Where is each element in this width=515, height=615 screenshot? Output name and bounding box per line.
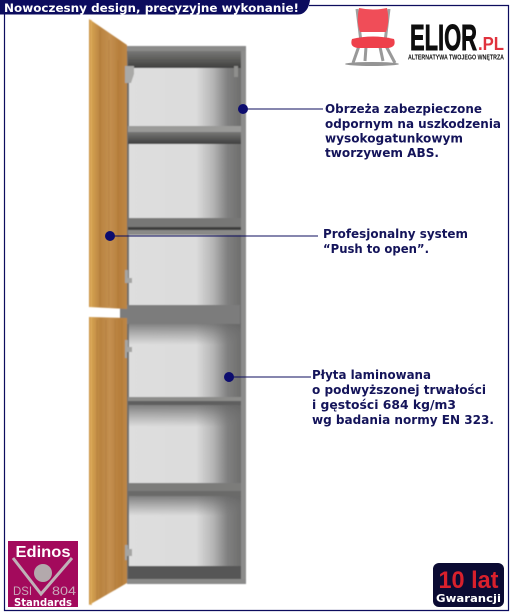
back panel 2 — [129, 144, 241, 218]
title banner: Nowoczesny design, precyzyjne wykonanie! — [4, 1, 299, 15]
badge: 10 year warranty: 10 lat — [438, 567, 499, 594]
cabinet illustration — [89, 19, 246, 605]
callout: laminated board: Płyta laminowana — [312, 368, 431, 382]
callout: push to open: Profesjonalny system — [323, 227, 468, 241]
badge: Edinos Standards: Edinos — [16, 544, 71, 561]
callout: push to open — [105, 227, 468, 256]
hinge 1 — [125, 66, 134, 83]
callout: ABS edges: odpornym na uszkodzenia — [325, 117, 501, 131]
door wood grain — [90, 20, 92, 605]
brand suffix: .PL — [478, 34, 504, 54]
back panel 4 — [129, 323, 241, 398]
back panel 3 — [129, 235, 241, 306]
bottom shelf — [127, 566, 246, 584]
callout: ABS edges: tworzywem ABS. — [325, 146, 439, 160]
badge: Edinos Standards: DSI — [13, 584, 32, 598]
callout: push to open: “Push to open”. — [323, 242, 429, 256]
badge: Edinos Standards — [8, 541, 78, 609]
badge: 10 year warranty — [433, 563, 504, 607]
callout: laminated board: i gęstości 684 kg/m3 — [312, 398, 456, 412]
hinge 3 — [125, 340, 132, 358]
badge: Edinos Standards: Standards — [14, 596, 72, 609]
callout: ABS edges: Obrzeża zabezpieczone — [325, 102, 482, 116]
badge: 10 year warranty: Gwarancji — [436, 592, 501, 605]
cabinet body — [127, 46, 246, 584]
bracket — [234, 66, 238, 77]
shelf 4 — [128, 483, 241, 496]
shelf 2 — [128, 218, 241, 235]
back panel 6 — [129, 496, 241, 566]
shelf 1 — [128, 126, 241, 144]
lower door — [89, 317, 127, 605]
callout: ABS edges: wysokogatunkowym — [325, 132, 463, 146]
right side panel — [241, 46, 246, 584]
callout: laminated board: o podwyższonej trwałości — [312, 383, 486, 397]
callout: laminated board: wg badania normy EN 323. — [312, 413, 494, 427]
hinge 4 — [125, 545, 132, 560]
shelf 3 — [128, 397, 241, 405]
hinge 2 — [125, 270, 132, 283]
badge: Edinos Standards: 804 — [52, 584, 76, 598]
fixed middle shelf — [120, 305, 240, 324]
back panel 1 — [129, 68, 241, 127]
back panel 5 — [129, 405, 241, 483]
upper door — [89, 19, 127, 309]
icon: red chair — [345, 8, 399, 66]
top compartment shade — [128, 51, 241, 68]
logo: Elior — [345, 8, 504, 66]
callout: laminated board — [224, 368, 494, 427]
callout: ABS edges — [238, 102, 501, 160]
